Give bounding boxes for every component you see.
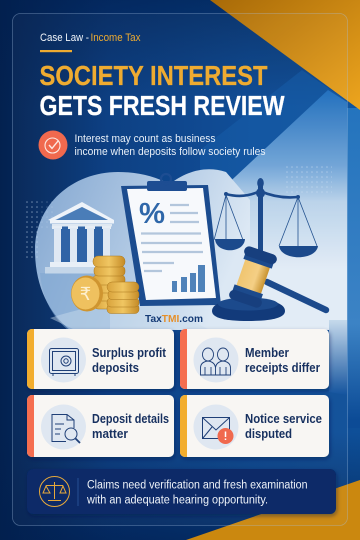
callout: conclusion: Claims need verification and fresh examination bbox=[87, 480, 308, 492]
icon: bank building bbox=[45, 202, 114, 274]
card: notice service disputed: disputed bbox=[245, 426, 292, 441]
title: SOCIETY INTEREST bbox=[40, 60, 268, 91]
icon: clipboard: % bbox=[139, 198, 165, 230]
callout: conclusion: with an adequate hearing opportunity. bbox=[86, 494, 268, 506]
card: surplus profit deposits: deposits bbox=[92, 360, 139, 375]
eyebrow: case law: Income Tax bbox=[90, 32, 141, 44]
card: surplus profit deposits bbox=[27, 329, 174, 389]
icon: clipboard bbox=[121, 174, 221, 306]
card: notice service disputed: Notice service bbox=[245, 411, 322, 426]
icon: document search bbox=[52, 414, 80, 443]
eyebrow: case law bbox=[40, 32, 141, 52]
icon: scales of justice bbox=[214, 178, 318, 257]
card: member receipts differ bbox=[180, 329, 329, 389]
hero illustration bbox=[24, 165, 332, 330]
icon: envelope alert bbox=[202, 418, 234, 444]
icon: coin stacks bbox=[71, 256, 139, 314]
icon: coin stacks: ₹ bbox=[80, 284, 91, 304]
card: member receipts differ: Member bbox=[245, 345, 289, 360]
title: GETS FRESH REVIEW bbox=[40, 90, 285, 121]
icon: safe bbox=[50, 348, 78, 376]
icon: gavel bbox=[212, 245, 326, 321]
card: deposit details matter: matter bbox=[92, 426, 128, 441]
card: surplus profit deposits: Surplus profit bbox=[92, 345, 167, 360]
brand: TaxTMI.com: TaxTMI.com bbox=[145, 313, 203, 325]
card: notice service disputed bbox=[180, 395, 329, 457]
icon: two people bbox=[200, 348, 230, 375]
hero background blob bbox=[24, 165, 332, 330]
icon: scales badge bbox=[40, 476, 70, 506]
title bbox=[40, 60, 285, 121]
card: deposit details matter: Deposit details bbox=[92, 411, 169, 426]
card: member receipts differ: receipts differ bbox=[245, 360, 320, 375]
eyebrow: case law: Case Law - bbox=[40, 32, 89, 44]
card: deposit details matter bbox=[27, 395, 174, 457]
icon: check badge bbox=[38, 130, 68, 160]
subtitle: Interest may count as business bbox=[74, 133, 216, 145]
callout: conclusion bbox=[27, 469, 336, 514]
subtitle: income when deposits follow society rules bbox=[74, 146, 266, 158]
